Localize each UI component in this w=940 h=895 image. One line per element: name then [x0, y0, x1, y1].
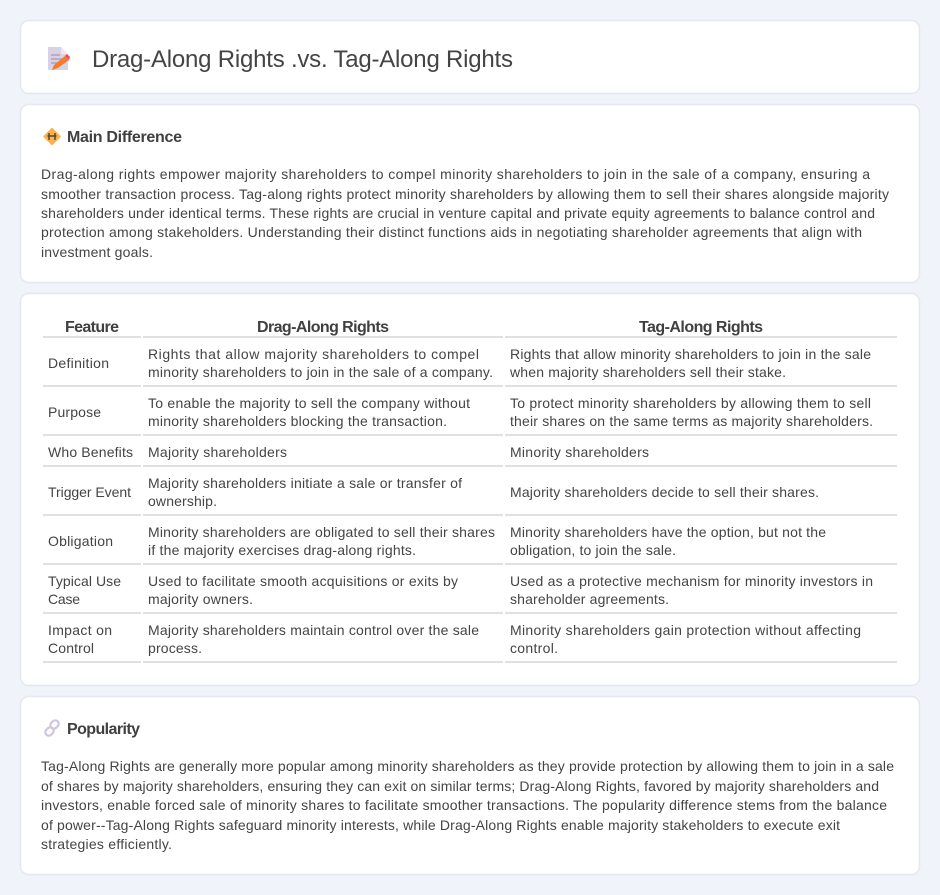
title: Drag-Along Rights .vs. Tag-Along Rights: [92, 46, 513, 73]
row: obligation: Minority shareholders are obligated to sell their shares: [148, 524, 495, 540]
row: impact on control: control.: [510, 640, 558, 656]
row: who benefits: [43, 444, 897, 467]
row: obligation: obligation, to join the sale.: [510, 542, 676, 558]
text block: main difference: smoother transaction process. Tag-along rights protect minority shareholders by allowing them to sell their shares alongside majority: [41, 186, 889, 202]
row: purpose: To enable the majority to sell the company without: [148, 395, 470, 411]
row: definition: when majority shareholders sell their stake.: [509, 364, 786, 380]
row: obligation: Minority shareholders have the option, but not the: [510, 524, 826, 540]
text block: popularity: of power--Tag-Along Rights safeguard minority interests, while Drag-Along Rights enable majority stakeholders to execute exit: [41, 817, 840, 833]
row: obligation: if the majority exercises drag-along rights.: [148, 542, 416, 558]
table header: Drag-Along Rights: [257, 319, 389, 336]
row: impact on control: Control: [48, 640, 94, 656]
table header: [43, 319, 897, 338]
row: typical use case: shareholder agreements.: [510, 591, 669, 607]
row: purpose: [43, 395, 897, 436]
text block: main difference: [41, 166, 889, 260]
text block: main difference: protection among stakeholders. Understanding their distinct functions aids in negotiating shareholder agreements that align with: [41, 224, 862, 240]
heading: main difference: Main Difference: [67, 129, 182, 146]
row: typical use case: majority owners.: [148, 591, 253, 607]
row: trigger event: Trigger Event: [48, 484, 131, 500]
row: definition: Rights that allow majority shareholders to compel: [148, 346, 479, 362]
row: definition: [43, 346, 897, 387]
row: impact on control: [43, 622, 897, 663]
row: who benefits: Minority shareholders: [510, 444, 649, 460]
row: purpose: their shares on the same terms as majority shareholders.: [510, 413, 873, 429]
text block: main difference: investment goals.: [41, 244, 153, 260]
row: purpose: Purpose: [48, 404, 101, 420]
row: trigger event: Majority shareholders decide to sell their shares.: [510, 484, 819, 500]
row: who benefits: Who Benefits: [48, 444, 133, 460]
row: typical use case: Case: [48, 591, 80, 607]
icon: link: [44, 719, 60, 737]
icon: warning diamond: [44, 128, 60, 144]
row: purpose: To protect minority shareholders by allowing them to sell: [510, 395, 871, 411]
row: impact on control: process.: [148, 640, 202, 656]
text block: popularity: Tag-Along Rights are generally more popular among minority shareholders as they provide protection by allowing them to join in a sale: [41, 758, 894, 774]
row: typical use case: Typical Use: [48, 573, 121, 589]
row: impact on control: Minority shareholders gain protection without affecting: [510, 622, 861, 638]
text block: popularity: [41, 758, 894, 852]
panel: main difference: [20, 104, 920, 282]
panel: comparison table: [20, 294, 920, 686]
row: definition: Definition: [48, 355, 109, 371]
row: impact on control: Impact on: [48, 622, 112, 638]
row: obligation: Obligation: [48, 533, 113, 549]
panel: popularity: [20, 696, 920, 874]
row: trigger event: ownership.: [148, 493, 217, 509]
text block: main difference: shareholders under identical terms. These rights are crucial in venture capital and private equity agreements to balance control and: [41, 205, 875, 221]
row: typical use case: [43, 573, 897, 614]
table header: Feature: [65, 319, 119, 336]
row: definition: minority shareholders to join in the sale of a company.: [148, 364, 493, 380]
text block: popularity: investors, enable forced sale of minority shares to facilitate smoother transactions. The popularity difference stems from the balance: [41, 797, 887, 813]
text block: main difference: Drag-along rights empower majority shareholders to compel minority shareholders to join in the sale of a company, ensuring a: [41, 166, 870, 182]
row: trigger event: Majority shareholders initiate a sale or transfer of: [148, 475, 462, 491]
row: who benefits: Majority shareholders: [148, 444, 287, 460]
icon: document with pencil: [48, 47, 70, 70]
text block: popularity: of shares by majority shareholders, ensuring they can exit on similar terms; Drag-Along Rights, favored by majority shareholders and: [41, 778, 879, 794]
heading: popularity: Popularity: [67, 721, 140, 738]
row: definition: Rights that allow minority shareholders to join in the sale: [510, 346, 871, 362]
panel: header: [20, 20, 920, 94]
row: obligation: [43, 524, 897, 565]
table header: Tag-Along Rights: [639, 319, 763, 336]
row: typical use case: Used to facilitate smooth acquisitions or exits by: [148, 573, 458, 589]
text block: popularity: strategies efficiently.: [41, 836, 172, 852]
row: trigger event: [43, 475, 897, 516]
row: impact on control: Majority shareholders maintain control over the sale: [148, 622, 479, 638]
row: typical use case: Used as a protective mechanism for minority investors in: [510, 573, 873, 589]
row: purpose: minority shareholders blocking the transaction.: [148, 413, 447, 429]
